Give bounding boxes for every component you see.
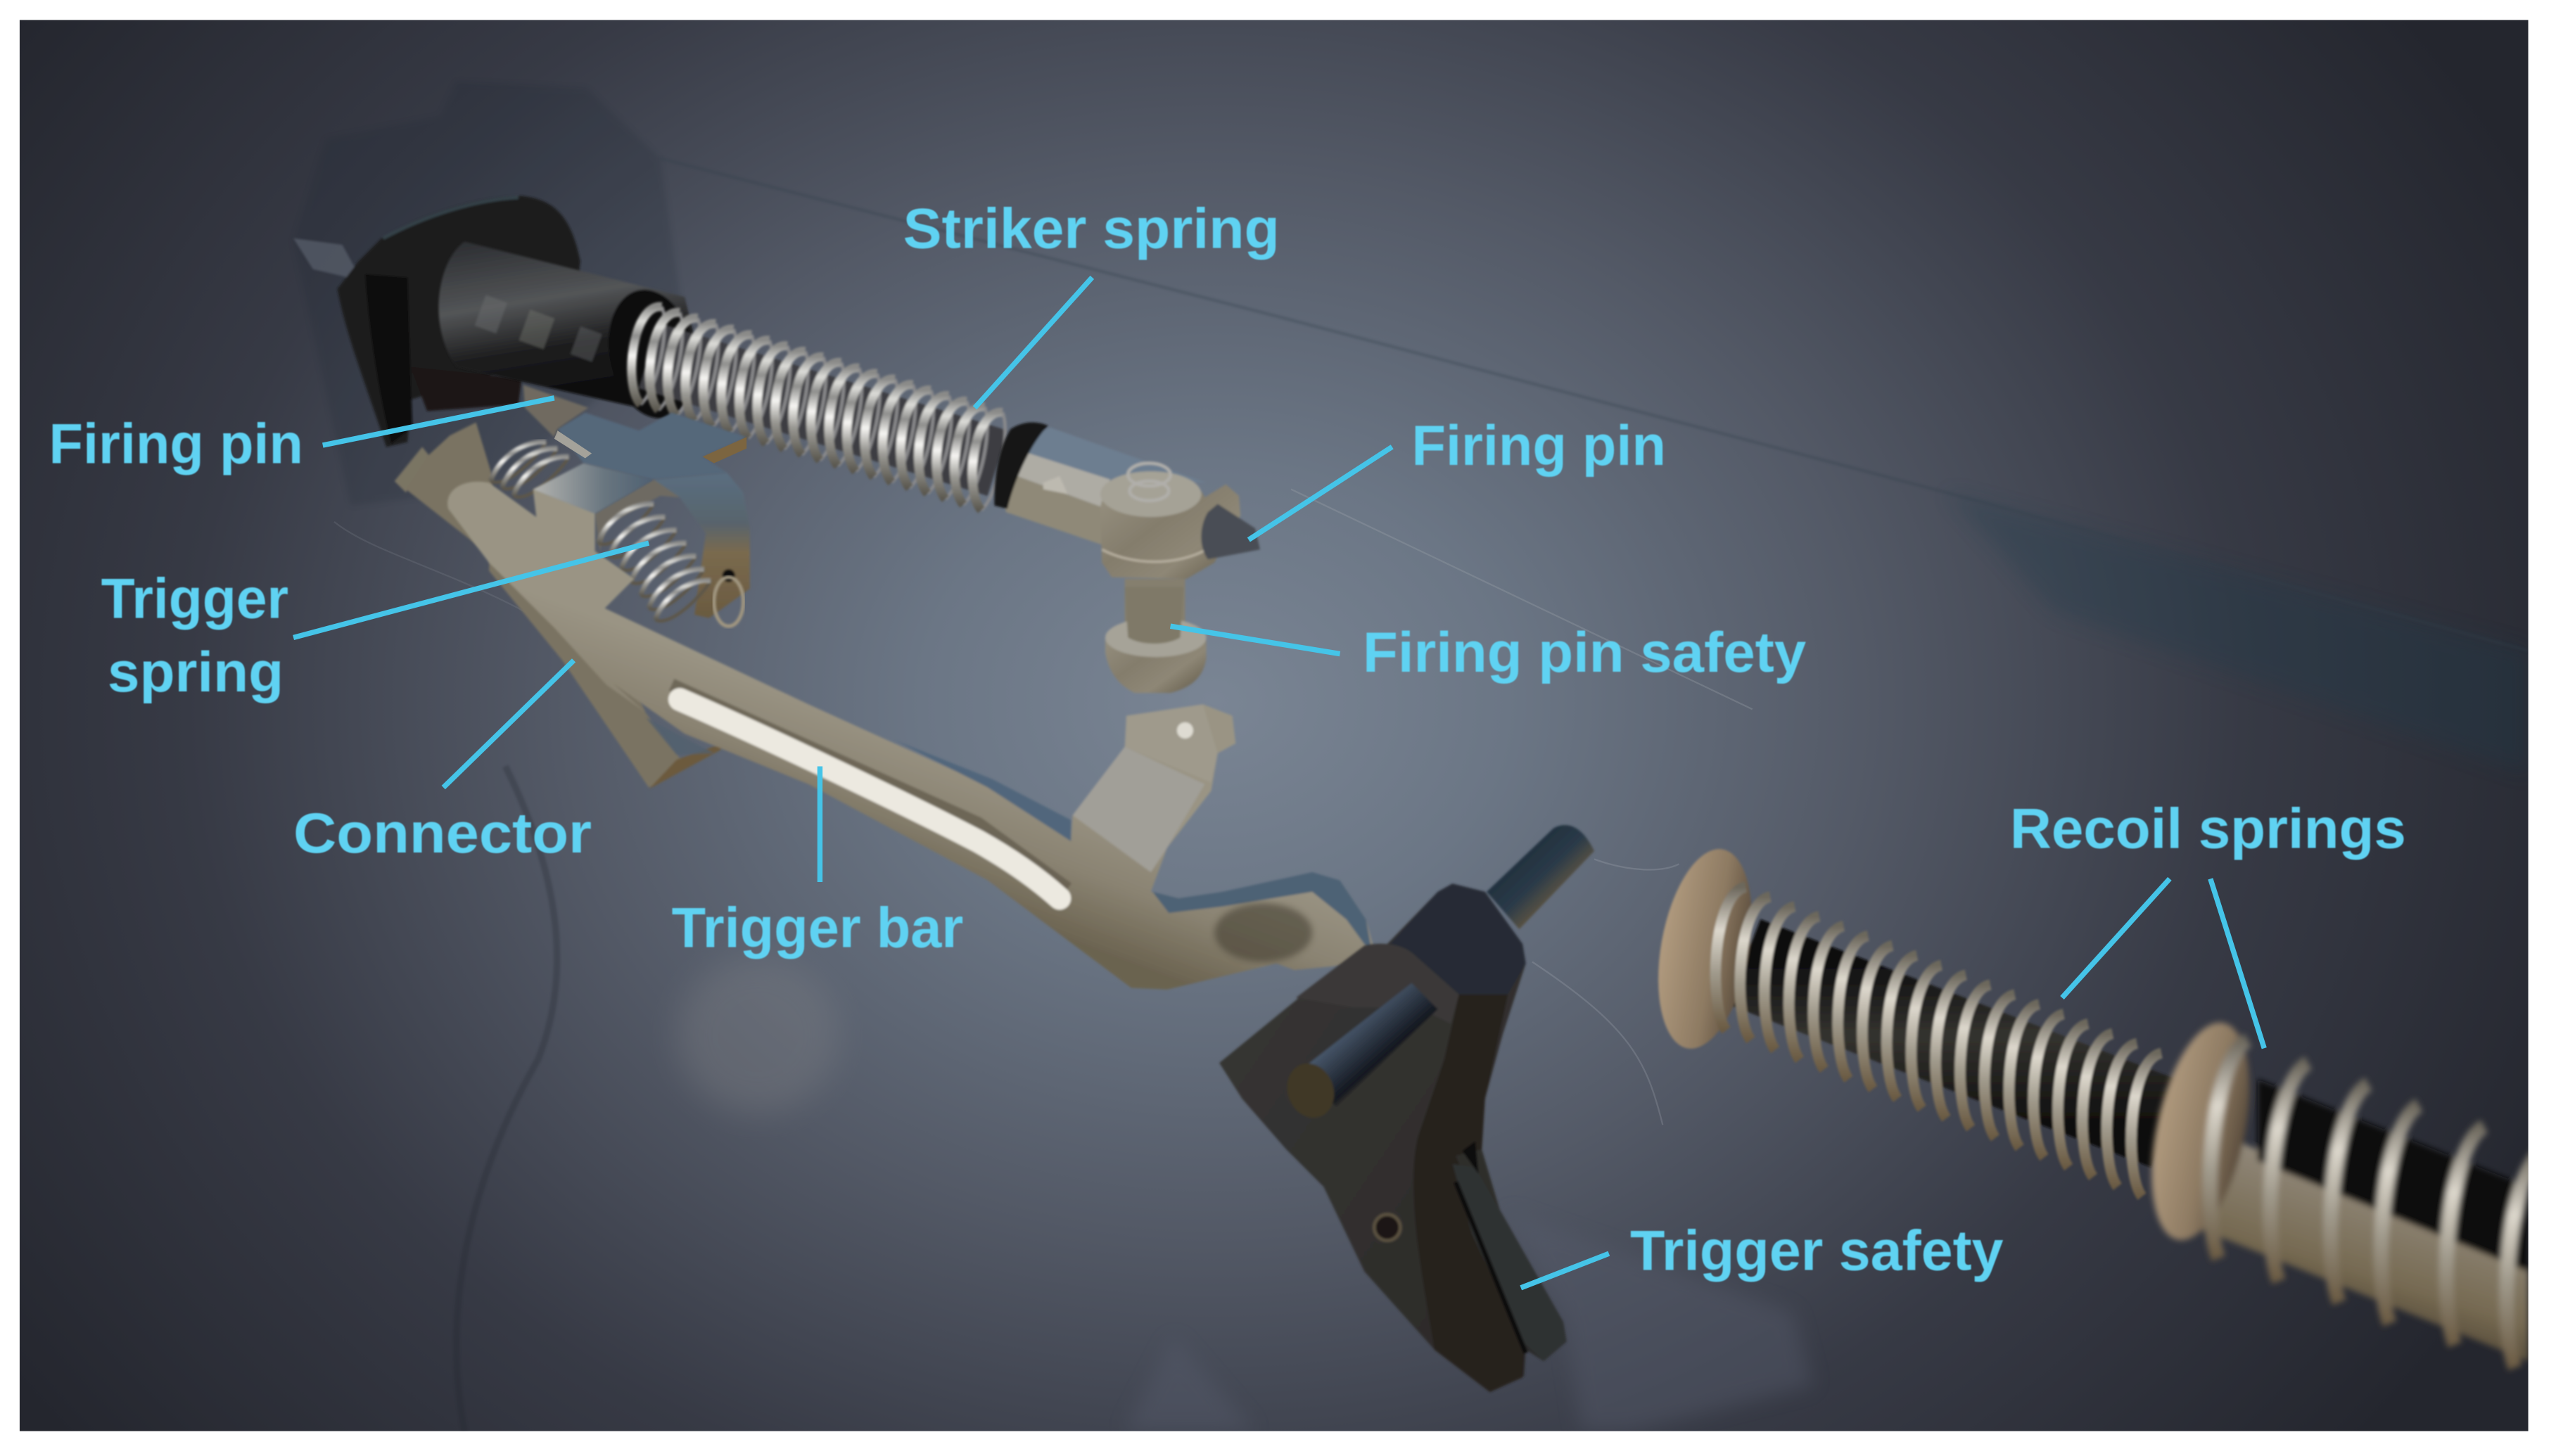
- detail: slit: [1456, 1182, 1526, 1353]
- part: firing pin with head and safety: [994, 422, 1260, 693]
- part: trigger spring clip: [595, 473, 750, 618]
- detail: lug face: [1125, 704, 1218, 783]
- part: firing pin safety disc: [1105, 620, 1207, 693]
- part: safety stem: [1125, 579, 1185, 641]
- part: firing pin tip: [1201, 504, 1260, 559]
- detail: upper band: [1296, 944, 1459, 1024]
- part: lower pin: [1280, 983, 1438, 1125]
- label: Striker spring: Striker spring: [903, 198, 1280, 261]
- leader: recoil springs (rear): [2211, 879, 2264, 1048]
- leader: firing pin (right): [1249, 447, 1392, 539]
- leader: connector: [443, 660, 574, 788]
- part: bright top flange: [533, 463, 654, 513]
- label: Trigger spring: Trigger: [101, 568, 288, 631]
- detail: blue curved edge: [1152, 872, 1373, 955]
- part: recoil spring (front, thin): [1644, 842, 2168, 1196]
- cylinder: striker sleeve: [438, 241, 707, 426]
- part: upper pin: [1487, 825, 1594, 929]
- part: trigger body: [1219, 883, 1567, 1392]
- part: safety blade: [1452, 1164, 1567, 1361]
- detail: dark side ridge: [1413, 995, 1524, 1392]
- leader: firing pin (left): [323, 398, 554, 445]
- detail: silver bend: [1073, 747, 1204, 872]
- labels and leader lines: [49, 198, 2406, 1288]
- label: Firing pin (left): Firing pin: [49, 412, 303, 475]
- label: Firing pin safety: Firing pin safety: [1363, 621, 1806, 684]
- detail: navy top: [1385, 883, 1526, 995]
- detail: lug ball: [1177, 722, 1193, 739]
- part: trigger spring: [598, 504, 711, 621]
- part: pivot hole: [1374, 1215, 1400, 1241]
- part: trigger and trigger safety: [1219, 825, 1594, 1392]
- part: silver strip: [554, 430, 592, 459]
- rear block: black striker housing: [293, 196, 580, 447]
- label: Connector: Connector: [293, 802, 592, 865]
- label: Trigger bar: Trigger bar: [672, 897, 963, 960]
- detail: notch: [1462, 1141, 1478, 1174]
- part: striker spring: [632, 307, 1005, 510]
- part: trigger bar: [447, 463, 1378, 990]
- leader: firing pin safety: [1171, 626, 1340, 654]
- label: Recoil springs: Recoil springs: [2010, 797, 2406, 860]
- part: blue-grey mounting plate: [557, 413, 746, 480]
- label: Trigger safety: Trigger safety: [1630, 1219, 2004, 1282]
- leader: striker spring: [975, 277, 1092, 408]
- part: front plate and bar body: [447, 482, 1378, 990]
- part: head block: [1100, 484, 1241, 580]
- part: upper bracket: [523, 385, 588, 437]
- leader: trigger spring: [293, 543, 649, 637]
- part: connector: [395, 423, 722, 789]
- part: tan tab: [703, 437, 746, 463]
- label: Firing pin (right): Firing pin: [1411, 414, 1666, 478]
- part: recoil spring (rear, large and out of focus): [2135, 1014, 2545, 1367]
- leader: trigger safety: [1521, 1253, 1609, 1288]
- leader: trigger bar: [819, 766, 821, 882]
- detail: bar highlight slot: [680, 699, 1060, 898]
- part: rear small spring: [490, 442, 569, 497]
- detail: blue ridge along bar: [895, 740, 1071, 841]
- detail: slot groove shadow: [672, 685, 1068, 888]
- label: Trigger spring: spring: [108, 641, 284, 704]
- part: spring ring: [714, 577, 744, 626]
- leader: recoil springs (front): [2062, 879, 2170, 997]
- detail: shaded web: [1214, 903, 1312, 962]
- part: retaining rings: [1128, 463, 1171, 501]
